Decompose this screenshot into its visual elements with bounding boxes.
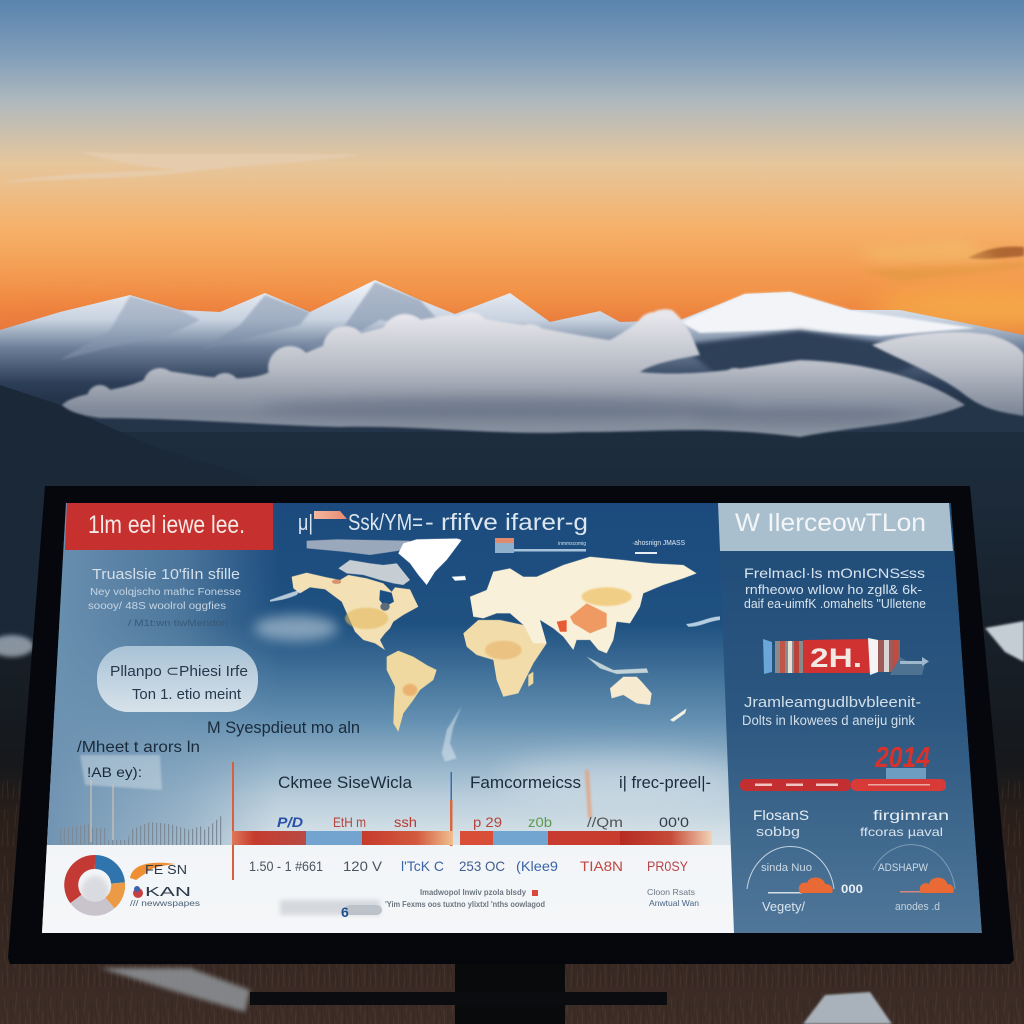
right gauge block [860,807,955,913]
map legend: ·ahosnign JMASS [632,540,685,547]
slider: 6 [341,904,349,920]
timeline labels: //Qm [587,814,623,830]
footer note [385,888,545,909]
timeline headings [278,776,710,792]
north america [292,573,418,650]
australia [610,677,652,705]
sidebar second text block: Jramleamgudlbvbleenit- [744,694,921,711]
intro text block: Ney volqjscho mathc Fonesse [90,586,241,598]
arctic streak [307,539,410,555]
timeline values: 1.50 - 1 #661 [249,858,323,874]
timeline values [250,861,688,874]
monitor screen [40,503,982,933]
arctic islands [338,560,410,585]
map title: Ssk/YM= [348,509,423,535]
year with red bar: 2014 [874,742,930,774]
side heading: /Mheet t arors ln [77,739,200,756]
southeast asian islands [587,657,648,674]
white wisps [270,589,302,602]
callout pill: Ton 1. etio meint [132,686,242,703]
new zealand [670,708,687,722]
background: cloud bank [62,309,1024,437]
timeline labels: EtH m [333,814,366,830]
sidebar second text block: Dolts in Ikowees d aneiju gink [742,713,915,728]
monitor frame [8,486,1014,964]
footer credit [647,887,699,908]
right gauge block: ADSHAPW [878,862,929,874]
background: sunset sky [0,0,1024,340]
footer credit: Anwtual Wan [649,898,699,908]
year with red bar [740,742,946,791]
left gauge block: Vegety/ [762,899,805,914]
timeline labels: 00'0 [659,814,689,830]
south america [387,651,437,732]
timeline labels: z0b [528,814,552,830]
subheading: M Syespdieut mo aln [207,718,360,737]
red header [65,503,273,550]
ribbon graphic: 2H. [810,643,862,673]
panel: right sidebar [718,503,982,933]
left gauge block: FlosanS [753,807,809,823]
skyline chart [60,780,222,845]
icon: orange cloud [799,877,833,893]
icon: orange cloud [920,878,954,893]
left gauge block [747,807,834,914]
sidebar text block: daif ea-uimfK .omahelts "Ulletene [744,596,926,611]
timeline labels [277,817,688,830]
intro text block: Truaslsie 10'fiIn sfille [92,566,240,583]
iceland [452,576,466,581]
sidebar text block: Frelmacl·ls mOnICNS≤ss [744,565,925,581]
background: brush texture [0,780,1024,1024]
right gauge block: ffcoras µaval [860,825,943,839]
timeline bar [232,831,712,845]
logo mark: KAN [145,884,191,899]
intro text block: / M1t:wn tiwMendon [128,618,228,629]
timeline dividers [232,762,592,880]
heat shading [332,579,632,696]
sidebar header: W IlerceowTLon [735,509,926,537]
donut chart [71,862,118,909]
map title [298,509,588,535]
timeline values: TIA8N [580,858,623,874]
callout pill [97,646,258,712]
timeline values: 120 V [343,858,383,874]
right gauge block: firgimran [873,807,949,823]
monitor stand [250,960,667,1024]
timeline headings: Famcormeicss [470,773,581,792]
panel: left text column [60,503,360,845]
red header: 1lm eel iewe lee. [88,511,245,539]
timeline values: PR0SY [647,858,689,874]
timeline labels: P/D [277,814,303,830]
greenland [398,538,462,585]
africa [463,620,547,697]
slider [342,905,382,917]
map title: - rfifve ifarer-g [425,509,588,535]
intro text block [88,566,241,629]
world map [270,538,720,762]
hudson bay [379,590,394,607]
logo mark: /// newwspapes [130,898,200,908]
footer credit: Cloon Rsats [647,887,695,897]
logo mark [130,862,200,908]
timeline values: (Klee9 [516,858,558,874]
gauge separator value: 000 [841,882,863,896]
panel: footer [71,862,699,920]
left gauge block: sobbg [756,824,800,839]
sidebar text block: rnfheowo wIlow ho zgll& 6k- [745,582,922,597]
timeline headings: i| frec-preel|- [619,773,711,792]
side heading [77,739,200,790]
logo mark: FE SN [145,862,187,877]
eurasia [470,557,697,653]
ribbon graphic [763,638,929,675]
panel: timeline [232,762,712,880]
footer note: 'Yim Fexms oos tuxtno ylixtxl 'nths oowlagod [385,900,545,909]
intro text block: soooy/ 48S woolrol oggfies [88,600,226,612]
timeline labels: p 29 [473,814,502,830]
callout pill: Pllanpo ⊂Phiesi Irfe [110,663,248,680]
map legend: inmmscomig [558,541,586,547]
background: snowy mountain range [0,280,1024,640]
side heading: !AB ey): [87,764,142,780]
madagascar [528,672,533,687]
timeline values: l'TcK C [401,858,444,874]
map title: μ| [298,510,313,535]
timeline headings: Ckmee SiseWicla [278,773,413,792]
sidebar header [718,503,953,551]
background: side terrain and snow patches [0,621,1024,1024]
map legend [495,538,685,554]
sidebar second text block [742,694,921,728]
right gauge block: anodes .d [895,901,940,913]
left gauge block: sinda Nuo [761,862,812,874]
timeline labels: ssh [394,814,417,830]
panel: map and timeline [40,503,740,933]
sidebar text block [744,565,926,611]
footer note: Imadwopol Inwiv pzola blsdy [420,888,527,897]
background: ground and valley [0,340,1024,1024]
timeline values: 253 OC [459,858,505,874]
ocean streak [686,616,720,627]
